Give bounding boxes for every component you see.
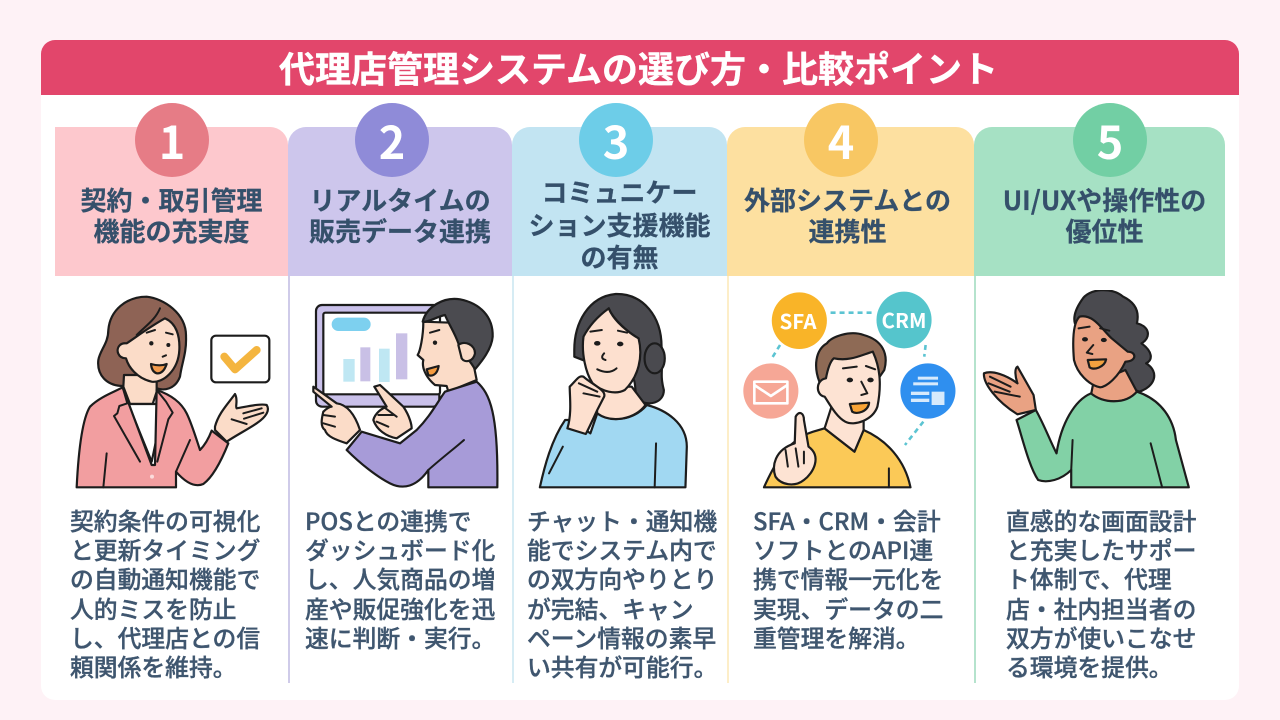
header block 4 [727, 127, 974, 276]
heading 2: 販売データ連携 [309, 212, 491, 249]
body text 2: 速に判断・実行。 [305, 619, 495, 654]
number badge 5: 5 [1097, 107, 1123, 172]
body text 1: 頼関係を維持。 [70, 648, 237, 683]
illustration: woman in green sweater gesturing [982, 290, 1190, 488]
panel: point 5 [974, 103, 1225, 683]
body text 4: SFA・CRM・会計 [753, 502, 941, 537]
body text 5: る環境を提供。 [1006, 648, 1173, 683]
number badge 4: 4 [828, 107, 854, 172]
body text 4: 重管理を解消。 [753, 619, 920, 654]
body text 5 [1006, 502, 1196, 683]
body text 5: ト体制で、代理 [1006, 560, 1172, 595]
body text 2: し、人気商品の増 [305, 560, 495, 595]
body text 3: チャット・通知機 [527, 502, 717, 537]
heading 1: 契約・取引管理 [80, 181, 262, 218]
body text 1: し、代理店との信 [70, 619, 260, 654]
heading 4: 外部システムとの [744, 181, 951, 218]
heading 3: コミュニケー [541, 173, 698, 210]
panel: point 1 [55, 103, 288, 683]
body text 4: 携で情報一元化を [753, 560, 943, 595]
body text 5: 直感的な画面設計 [1006, 502, 1196, 537]
body text 1: の自動通知機能で [70, 560, 260, 595]
body text 3: の双方向やりとり [527, 560, 717, 595]
panel: point 4 [727, 103, 974, 683]
illustration: man with SFA, CRM, mail and document icons: SFA [779, 305, 817, 335]
illustration: woman in pink blazer with checkmark [76, 296, 270, 488]
body text 2: ダッシュボード化 [305, 531, 495, 566]
body text 5: 双方が使いこなせ [1006, 619, 1196, 654]
body text 5: と充実したサポー [1006, 531, 1196, 566]
title: 代理店管理システムの選び方・比較ポイント [279, 41, 998, 93]
body text 3: 能でシステム内で [527, 531, 717, 566]
body text 4 [753, 502, 943, 654]
illustration: woman with headset [538, 292, 688, 488]
illustration: man pointing at dashboard chart [312, 298, 498, 488]
header block 5 [974, 127, 1225, 276]
body text 3 [527, 502, 717, 683]
heading 4: 連携性 [808, 212, 886, 249]
body text 2: 産や販促強化を迅 [305, 590, 495, 625]
header block 3 [512, 127, 727, 276]
heading 1 [80, 181, 262, 249]
body text 1 [70, 502, 260, 683]
body text 5: 店・社内担当者の [1006, 590, 1196, 625]
heading 3 [528, 173, 710, 275]
heading 3: の有無 [580, 238, 658, 275]
number badge 5 [1073, 103, 1147, 177]
heading 2 [309, 181, 491, 249]
heading 3: ション支援機能 [528, 206, 710, 242]
title [37, 39, 1243, 95]
heading 5: 優位性 [1065, 212, 1144, 249]
number badge 1 [135, 103, 209, 177]
panel: point 2 [288, 103, 512, 683]
illustration: man with SFA, CRM, mail and document icons: CRM [882, 304, 926, 334]
panel: point 3 [512, 103, 727, 683]
body text 2 [305, 502, 495, 654]
body text 1: 契約条件の可視化 [70, 502, 260, 537]
number badge 2 [355, 103, 429, 177]
body text 1: 人的ミスを防止 [70, 590, 237, 625]
body text 3: い共有が可能行。 [527, 648, 717, 683]
body text 2: POSとの連携で [305, 502, 472, 537]
illustration: man with SFA, CRM, mail and document icons [743, 292, 956, 488]
heading 5 [1003, 181, 1206, 249]
heading 5: UI/UXや操作性の [1003, 181, 1206, 218]
body text 4: 実現、データの二 [753, 590, 943, 625]
number badge 1: 1 [159, 107, 185, 172]
header block 1 [55, 127, 288, 276]
header block 2 [288, 127, 512, 276]
heading 1: 機能の充実度 [93, 212, 250, 249]
number badge 4 [804, 103, 878, 177]
body text 4: ソフトとのAPI連 [753, 531, 933, 566]
body text 1: と更新タイミング [70, 531, 260, 566]
number badge 3: 3 [603, 107, 629, 172]
heading 4 [744, 181, 951, 249]
number badge 3 [579, 103, 653, 177]
heading 2: リアルタイムの [309, 181, 491, 218]
number badge 2: 2 [379, 107, 405, 172]
body text 3: が完結、キャン [527, 590, 694, 625]
body text 3: ペーン情報の素早 [527, 619, 716, 654]
